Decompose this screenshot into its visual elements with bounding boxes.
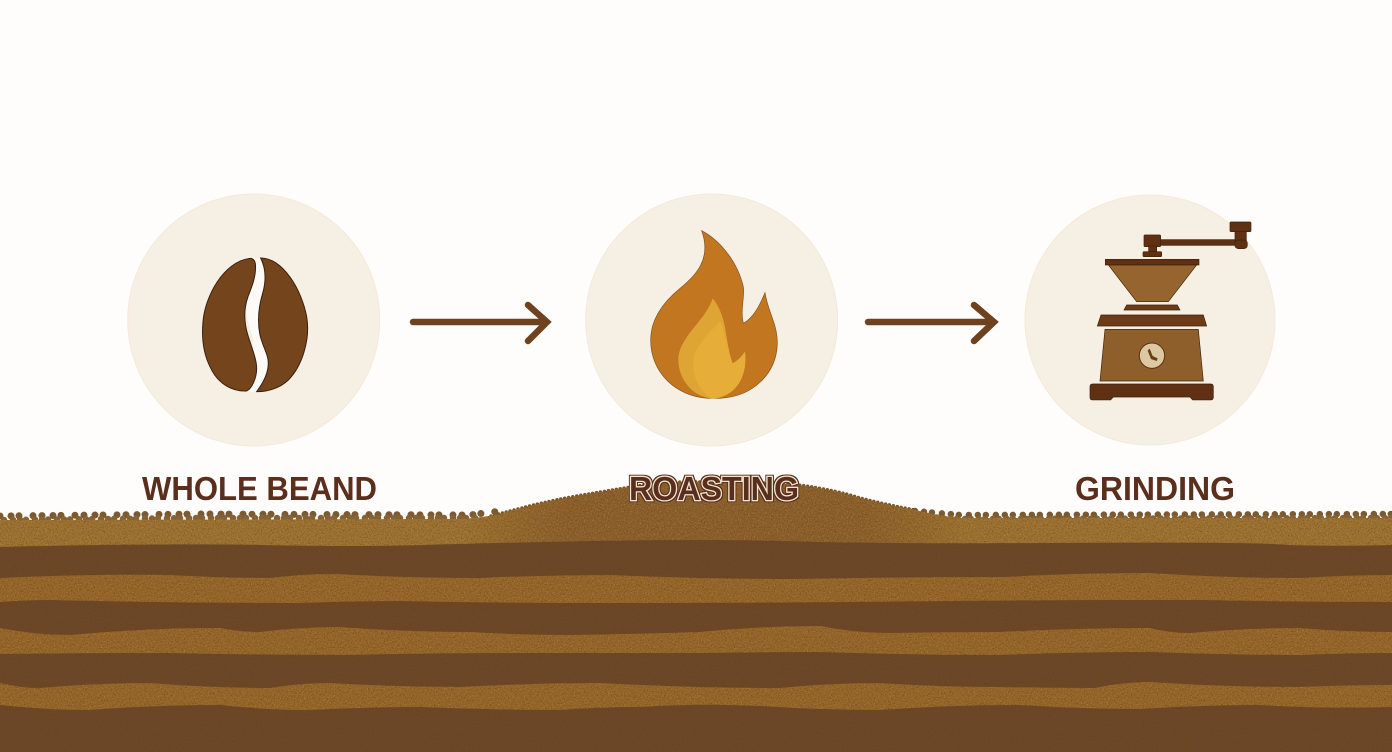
bean halves — [203, 258, 308, 392]
body — [1100, 329, 1203, 381]
label: grinding: GRINDING — [1075, 470, 1235, 507]
label: roasting: ROASTING — [629, 470, 799, 507]
panel: roasting — [586, 194, 838, 507]
icon: flame — [651, 231, 777, 398]
circle: grinding — [1025, 195, 1275, 445]
dark band 2 — [0, 600, 1392, 752]
panel: grinding — [1025, 195, 1275, 507]
base — [1090, 384, 1213, 400]
body top — [1097, 315, 1207, 326]
dial hands — [1148, 349, 1158, 361]
icon: coffee grinder — [1090, 222, 1251, 400]
hopper — [1108, 265, 1197, 302]
inner flame — [678, 298, 745, 398]
coffee ground layers — [0, 482, 1392, 752]
bean cleft — [245, 258, 268, 392]
arrow: bean to roasting — [413, 305, 547, 341]
dark band 4 — [0, 705, 1392, 752]
surface granules — [0, 482, 1392, 520]
circle: roasting — [586, 194, 838, 446]
panel: whole bean — [128, 194, 380, 507]
dark band 1 — [0, 540, 1392, 752]
dial — [1139, 343, 1165, 368]
arrow: roasting to grinding — [868, 305, 994, 341]
top sand layer — [0, 482, 1392, 752]
collar — [1124, 305, 1180, 310]
light band 4 — [0, 682, 1392, 752]
crank handle — [1143, 222, 1251, 257]
flame highlight — [693, 322, 745, 398]
central mound — [470, 482, 960, 552]
light band 2 — [0, 573, 1392, 752]
hopper lid — [1105, 259, 1199, 265]
icon: coffee bean — [203, 258, 308, 392]
circle: whole bean — [128, 194, 380, 446]
dark band 3 — [0, 652, 1392, 752]
outer flame — [651, 231, 777, 398]
light band 3 — [0, 626, 1392, 752]
label: whole bean: WHOLE BEAND — [142, 470, 377, 507]
